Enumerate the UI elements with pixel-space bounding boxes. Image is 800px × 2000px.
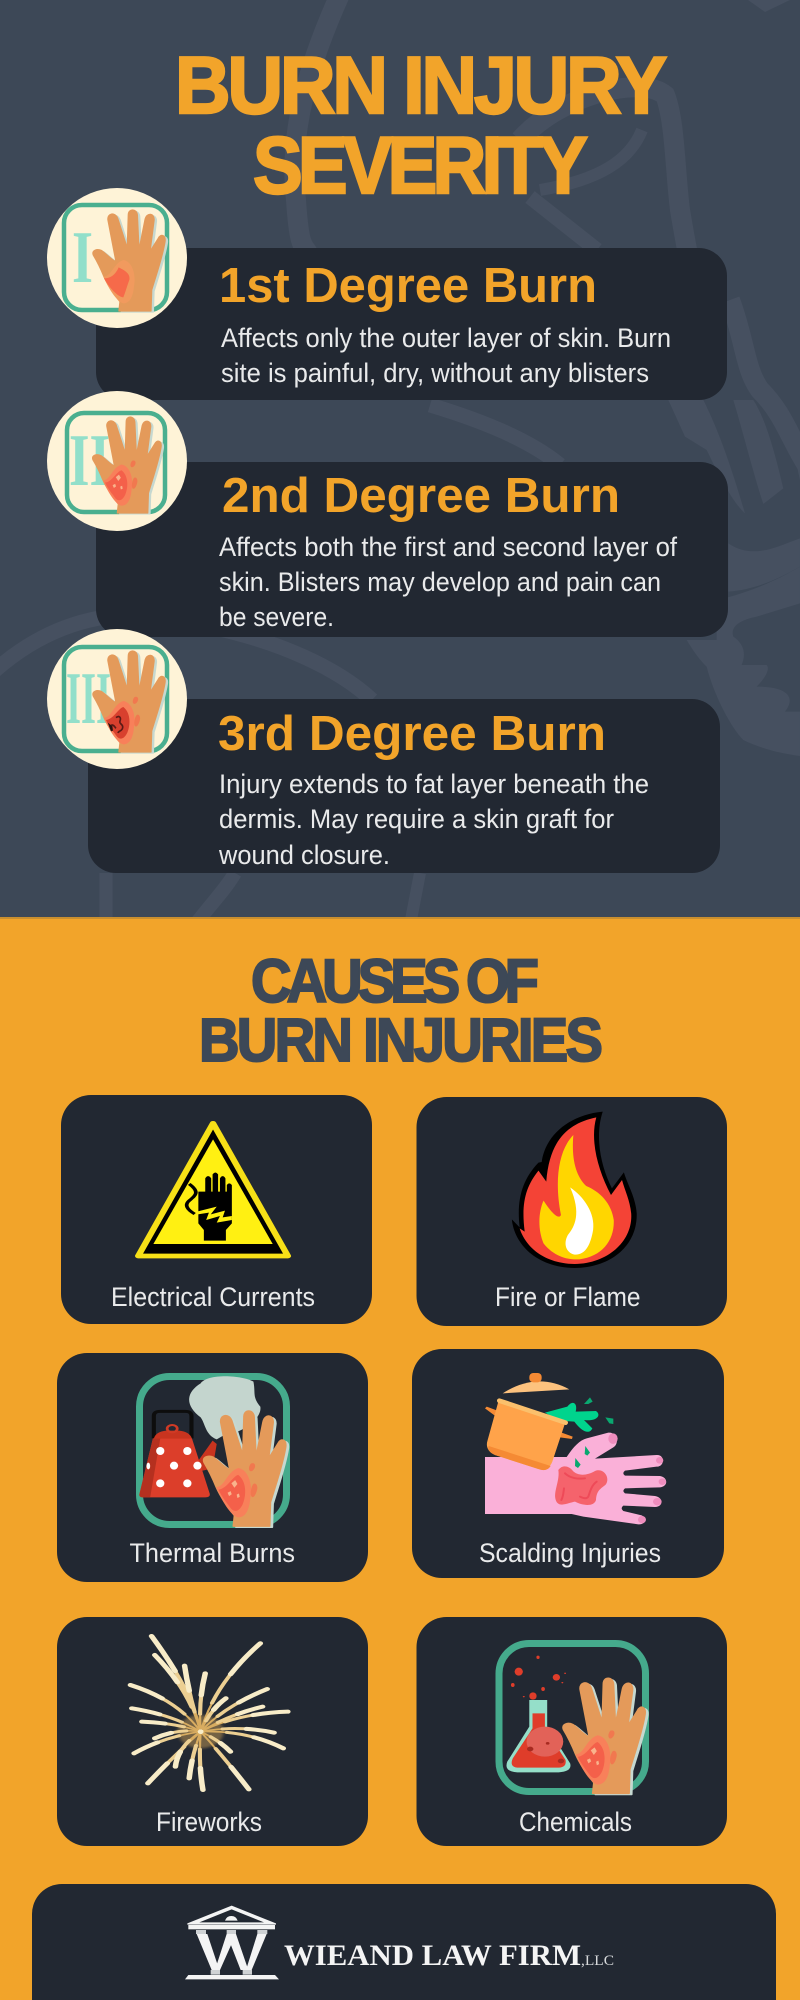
panel: orange causes background (0, 919, 800, 2000)
icon: second degree hand badge (47, 391, 187, 531)
icon: tipped pot over scalded hand (485, 1373, 666, 1524)
text: 3rd degree description: wound closure. (218, 840, 390, 870)
panel: electrical currents (61, 1095, 372, 1324)
panel: fire or flame (416, 1097, 727, 1326)
text: 1st degree description (221, 323, 671, 388)
text: 3rd degree description: Injury extends to fat layer beneath the (219, 769, 649, 799)
panel: dark severity background (0, 0, 800, 925)
label: thermal burns: Thermal Burns (130, 1538, 295, 1568)
title: burn injury severity (175, 39, 667, 211)
icon: first degree hand badge: I (72, 217, 93, 299)
text: 2nd degree description: Affects both the first and second layer of (219, 532, 678, 562)
text: 2nd degree description: be severe. (219, 602, 334, 632)
text: 1st degree description: site is painful, dry, without any blisters (221, 358, 649, 388)
heading: 3rd degree: 3rd Degree Burn (218, 707, 606, 761)
icon: first degree hand badge (47, 188, 187, 328)
panel: fireworks (57, 1617, 368, 1846)
icon: flask and burned hand (499, 1644, 648, 1794)
panel: scalding injuries (412, 1349, 724, 1578)
heading: causes of burn injuries: BURN INJURIES (199, 1007, 603, 1075)
heading: 1st degree: 1st Degree Burn (219, 259, 597, 313)
heading: causes of burn injuries: CAUSES OF (251, 948, 539, 1016)
text: 3rd degree description: dermis. May require a skin graft for (219, 804, 614, 834)
panel: chemicals (416, 1617, 727, 1846)
text: 3rd degree description (218, 769, 649, 870)
heading: causes of burn injuries (199, 948, 603, 1075)
title: burn injury severity: BURN INJURY (175, 39, 667, 130)
icon: third degree hand badge (47, 629, 187, 769)
icon: firework burst (130, 1636, 288, 1790)
text: 1st degree description: Affects only the outer layer of skin. Burn (221, 323, 671, 353)
logo: courthouse W emblem (185, 1906, 279, 1979)
icon: second degree hand badge: II (69, 420, 110, 502)
label: chemicals: Chemicals (519, 1807, 632, 1837)
text: 2nd degree description (219, 532, 678, 632)
label: fireworks: Fireworks (156, 1807, 262, 1837)
panel: thermal burns (57, 1353, 368, 1582)
heading: 2nd degree: 2nd Degree Burn (222, 469, 620, 523)
logo: firm name: ,LLC (581, 1953, 614, 1969)
icon: third degree hand badge: III (66, 658, 111, 740)
icon: kettle and burned hand (139, 1376, 289, 1527)
panel: 1st degree burn (96, 248, 727, 400)
logo: firm name: WIEAND LAW FIRM (284, 1939, 581, 1972)
panel: 3rd degree burn (88, 699, 720, 873)
icon: electric shock warning sign (138, 1123, 288, 1256)
panel: footer (32, 1884, 776, 2000)
icon: flame (512, 1112, 637, 1268)
text: 2nd degree description: skin. Blisters may develop and pain can (219, 567, 661, 597)
label: scalding injuries: Scalding Injuries (479, 1538, 661, 1568)
panel: 2nd degree burn (96, 462, 728, 637)
label: fire or flame: Fire or Flame (495, 1282, 640, 1312)
label: electrical currents: Electrical Currents (111, 1282, 315, 1312)
title: burn injury severity: SEVERITY (253, 121, 588, 211)
